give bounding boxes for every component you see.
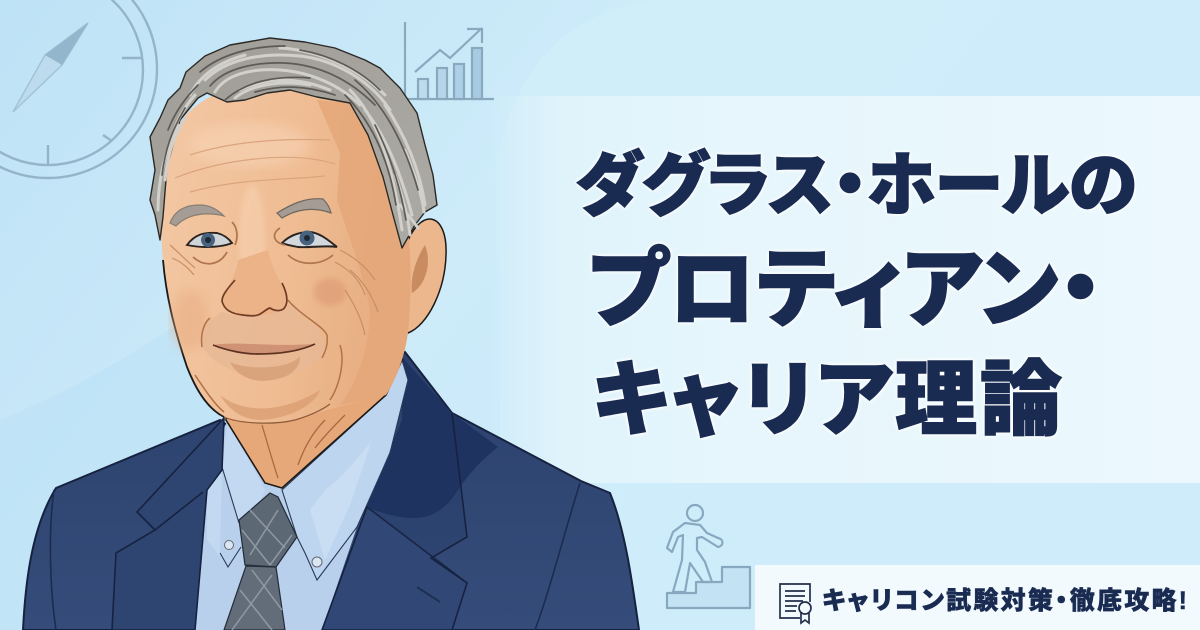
icon: person climbing stairs: [667, 505, 750, 608]
shirt collar: [282, 360, 408, 580]
hair strands: [158, 46, 425, 235]
title line 1: ダグラス・ホールの: [575, 147, 1137, 224]
mouth: [213, 344, 315, 354]
eyebrows: [170, 205, 224, 226]
badge: exam prep: [755, 565, 1200, 630]
title: [575, 147, 1137, 446]
ear: [392, 219, 446, 333]
tie: [239, 493, 297, 567]
muzzle tone: [201, 302, 325, 380]
face: [161, 83, 410, 423]
left lapel: [112, 418, 224, 630]
badge text: キャリコン試験対策・徹底攻略!: [822, 586, 1187, 615]
right lapel: [322, 507, 467, 630]
jaw line: [224, 404, 330, 423]
icon: growth chart: [405, 22, 494, 99]
eyes: [170, 222, 378, 335]
portrait: Douglas Hall: [23, 38, 639, 630]
face shading: [317, 100, 410, 405]
forehead wrinkles: [175, 140, 335, 192]
panel: title background: [490, 96, 1200, 483]
title line 3: キャリア理論: [592, 355, 1062, 446]
collar shadow: [365, 357, 498, 518]
shirt: [193, 360, 408, 630]
nose: [222, 250, 287, 315]
hair: [150, 38, 437, 248]
icon: certificate: [780, 584, 811, 623]
neck: [226, 320, 402, 488]
icon: compass: [0, 0, 157, 178]
jacket: [23, 352, 639, 630]
jacket seams: [50, 483, 580, 630]
face outline: [163, 260, 224, 417]
title line 2: プロティアン・: [588, 242, 1102, 338]
